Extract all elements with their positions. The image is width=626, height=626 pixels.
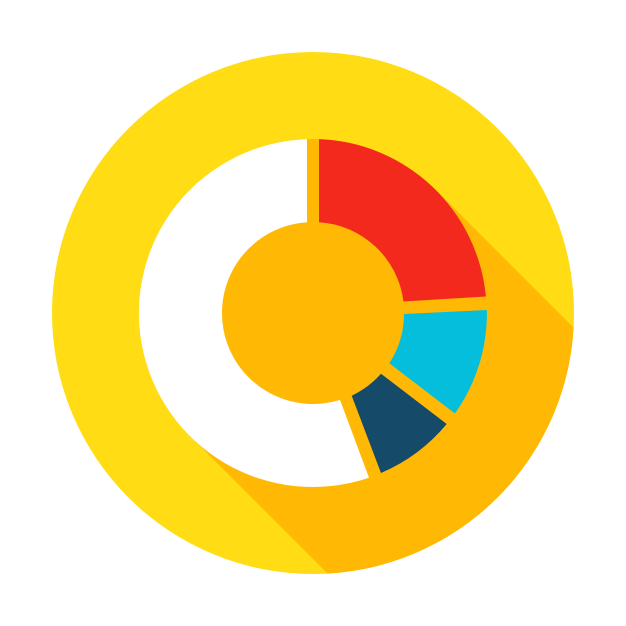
long shadow — [196, 192, 574, 574]
donut chart infographic — [52, 52, 574, 574]
segment: navy — [352, 374, 447, 473]
segment: white — [139, 139, 369, 487]
segment: red — [319, 139, 486, 302]
donut backing disc — [139, 139, 487, 487]
yellow circle background — [52, 52, 574, 574]
segment: blue — [389, 310, 487, 414]
